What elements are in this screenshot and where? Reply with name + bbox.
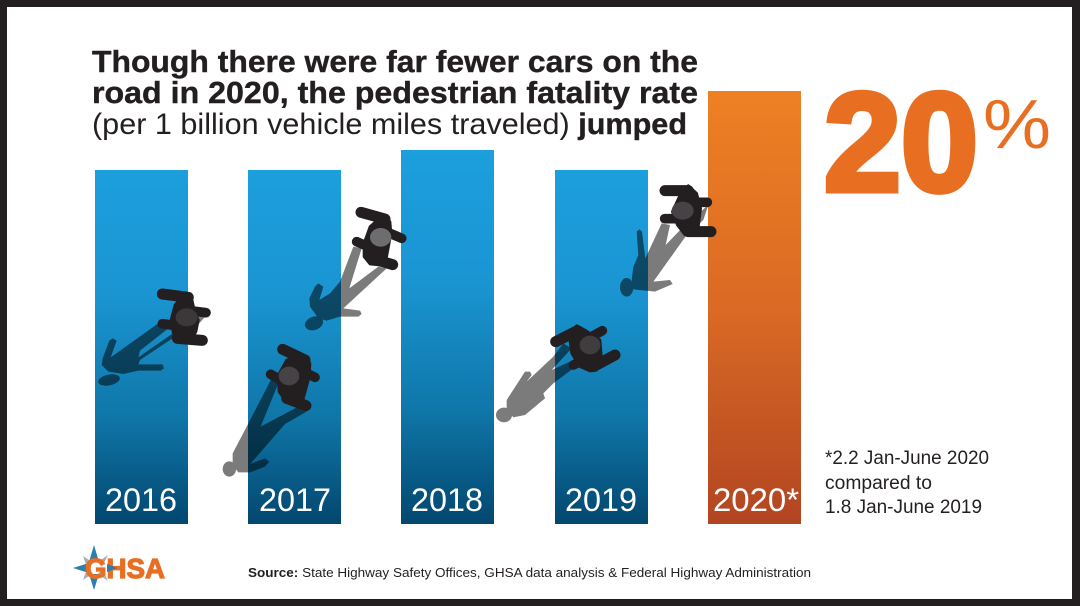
bar: 2020 [708,91,801,524]
year labels [105,482,799,518]
pedestrian shadows [97,205,708,477]
shadow: pedestrian 5 [620,205,708,297]
icon: compass east point [107,564,117,572]
bar: 2018 [401,150,494,524]
shadow: pedestrian 1 [97,313,207,388]
pedestrian 5 [665,186,711,235]
year labels: 2017 [259,482,331,518]
year labels: 2020* [713,482,799,518]
title: (per 1 billion vehicle miles traveled) jumped [92,108,687,141]
shadow: pedestrian 2 [223,378,307,477]
footnote: compared to [825,473,932,494]
bar chart [95,91,801,524]
footnote [825,448,989,518]
source line: Source: State Highway Safety Offices, GHSA data analysis & Federal Highway Administration [248,566,811,580]
shadow: pedestrian 3 [303,247,387,333]
GHSA logo [73,545,165,590]
footnote: *2.2 Jan-June 2020 [825,448,989,469]
bar: 2016 [95,170,188,524]
shadow: pedestrian 4 [496,343,573,422]
big stat: 20% [824,64,1051,220]
footnote: 1.8 Jan-June 2019 [825,497,982,518]
logo wordmark: GHSA [85,553,165,584]
year labels: 2018 [411,482,483,518]
pedestrian 3 [357,212,402,265]
title: Though there were far fewer cars on the [92,45,698,79]
pedestrian 1 [162,293,206,342]
big stat: 20%: 20 [824,64,978,220]
title: road in 2020, the pedestrian fatality rate [92,76,698,110]
icon: compass star [73,545,108,590]
pedestrian 4 [556,326,615,371]
pedestrians [162,186,711,406]
big stat: 20%: % [983,85,1051,163]
bar: 2019 [555,170,648,524]
year labels: 2016 [105,482,177,518]
bar: 2017 [248,170,341,524]
year labels: 2019 [565,482,637,518]
title [92,45,698,141]
pedestrian 2 [271,349,315,406]
